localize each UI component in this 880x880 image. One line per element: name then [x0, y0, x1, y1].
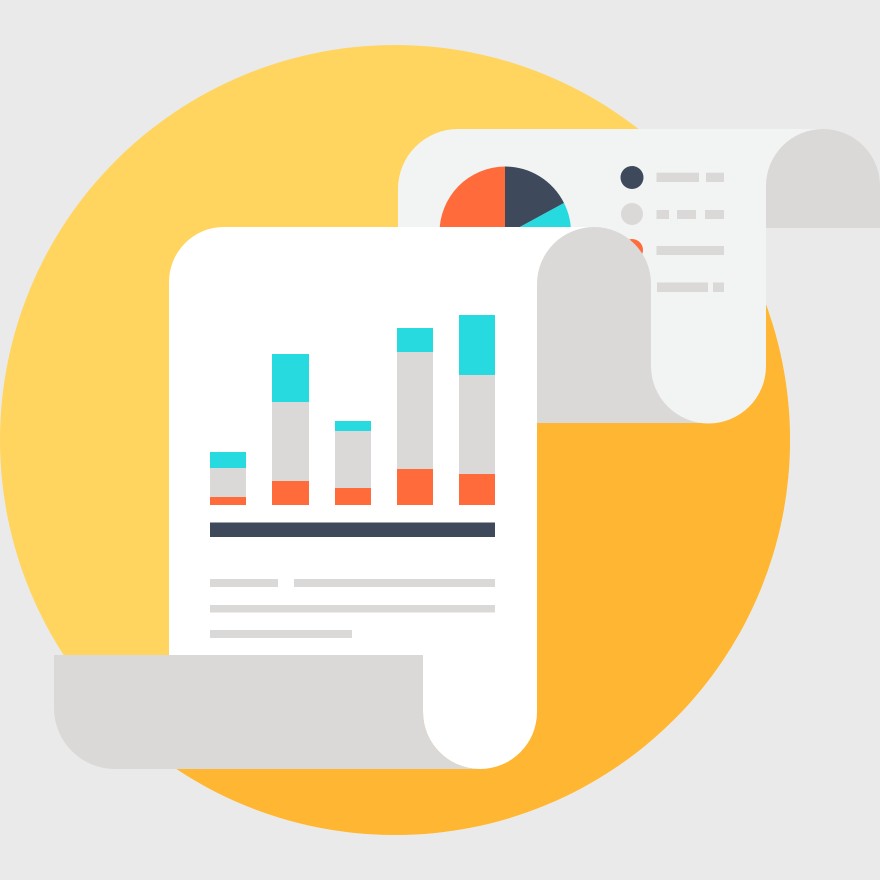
placeholder text lines [210, 579, 495, 638]
bar 4 [397, 328, 433, 505]
roll underlay [640, 340, 708, 423]
bar 5 [459, 315, 495, 505]
stacked bar chart [210, 315, 495, 505]
panel: back page [398, 129, 880, 424]
front page sheet [169, 227, 594, 769]
pie chart [439, 166, 571, 233]
bottom roll [54, 655, 480, 769]
bar 3 [335, 421, 371, 505]
legend [620, 166, 724, 292]
back page sheet [398, 129, 823, 424]
panel: front page [54, 227, 651, 769]
back page top-right roll [766, 129, 880, 228]
top roll [537, 227, 651, 423]
dark heading bar [210, 522, 495, 537]
bar 1 [210, 452, 246, 505]
bar 2 [272, 354, 309, 505]
